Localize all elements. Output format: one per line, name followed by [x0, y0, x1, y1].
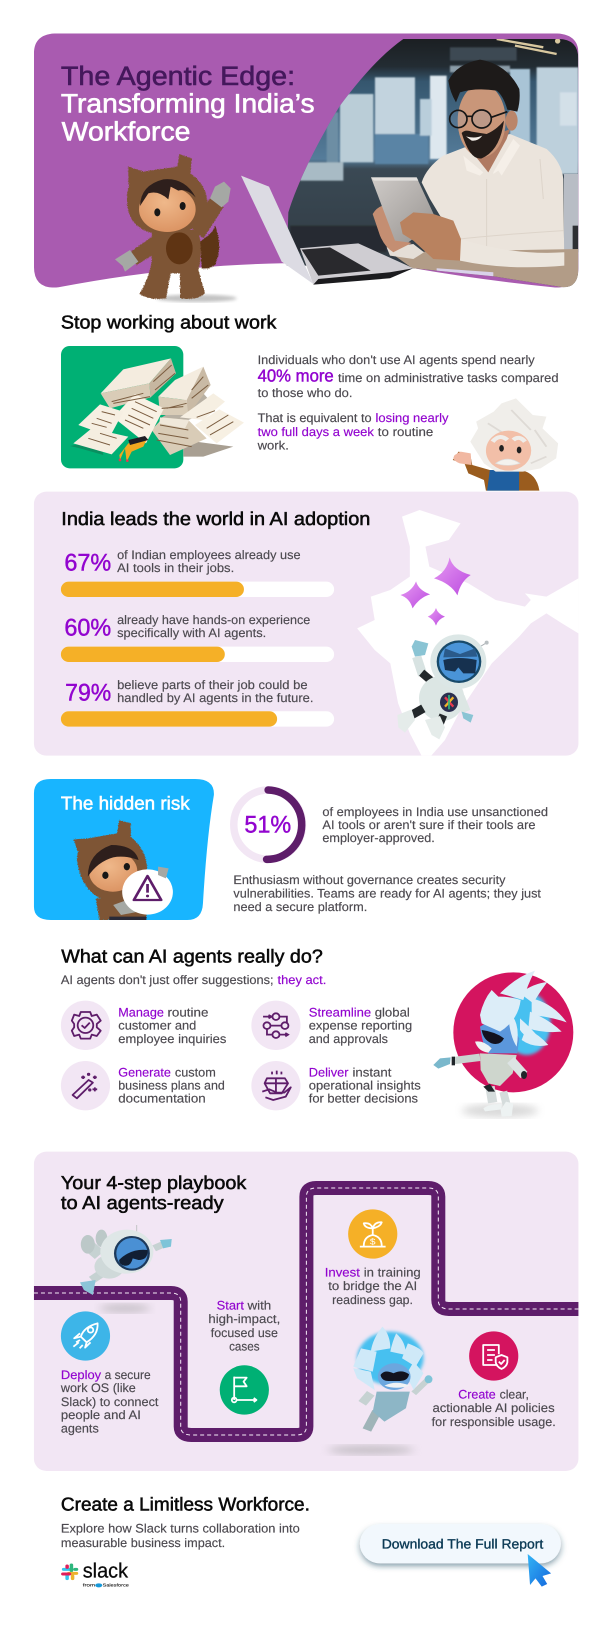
mascot: diving robot: [80, 1225, 172, 1313]
step: start: focused use: [211, 1326, 278, 1340]
item: streamline: global: [375, 1006, 410, 1019]
icon: sparkles: [400, 557, 471, 626]
heading: Your 4-step playbook: [61, 1172, 247, 1193]
mascot: robot astronaut: [397, 634, 489, 739]
risk text: need a secure platform.: [233, 900, 367, 914]
stat text: 40% more: [258, 366, 334, 386]
step: deploy: agents: [61, 1421, 99, 1435]
step: invest: [325, 1209, 421, 1307]
donut chart 51%: 51%: [244, 811, 291, 838]
mascot: robot professor on pink circle: [433, 971, 573, 1117]
heading: [61, 1172, 247, 1213]
stat: 60%: already have hands-on experience: [117, 613, 310, 627]
risk text: employer-approved.: [322, 831, 435, 845]
step: start: high-impact,: [208, 1312, 280, 1326]
stat: 79%: 79%: [65, 679, 111, 706]
section: hidden risk: [34, 779, 548, 920]
item: deliver: operational insights: [309, 1079, 421, 1092]
step: invest: to bridge the AI: [328, 1279, 417, 1293]
stat: 67%: AI tools in their jobs.: [117, 561, 234, 575]
stat: 60%: 60%: [64, 614, 111, 641]
heading: Stop working about work: [61, 312, 277, 333]
blue panel: [34, 779, 214, 920]
stat text: That is equivalent to: [258, 411, 372, 425]
logo: slack from Salesforce: [63, 1559, 129, 1588]
stepped road: [34, 1188, 578, 1435]
hero banner: [34, 33, 578, 302]
photo of man at work: [280, 38, 578, 289]
icon: cursor arrow: [528, 1554, 551, 1587]
subheading: they act.: [278, 973, 326, 987]
step: start: Start: [217, 1299, 244, 1312]
item: generate: custom: [175, 1066, 216, 1079]
risk text: [233, 805, 548, 914]
mascot: professor: [453, 398, 558, 491]
stat: 79%: [61, 678, 334, 727]
item: deliver: instant: [352, 1066, 392, 1079]
button: download report: [360, 1524, 561, 1563]
item: generate: [61, 1061, 225, 1110]
step: create: [432, 1331, 556, 1429]
stat text: work.: [257, 438, 289, 452]
donut chart 51%: [234, 790, 302, 859]
step: create: clear,: [500, 1388, 529, 1401]
step: start: [208, 1299, 280, 1415]
item: streamline: and approvals: [309, 1032, 388, 1046]
risk text: AI tools or aren't sure if their tools are: [322, 818, 535, 832]
button: download report: Download The Full Report: [382, 1537, 543, 1551]
map of India: [357, 510, 578, 756]
stat text: two full days a week: [258, 425, 374, 439]
closing text: Explore how Slack turns collaboration into: [61, 1522, 300, 1535]
mascot: bear waving: [115, 154, 237, 302]
logo: slack from Salesforce: slack: [83, 1559, 128, 1582]
risk text: vulnerabilities. Teams are ready for AI agents; they just: [233, 887, 541, 900]
step: deploy: people and AI: [61, 1408, 141, 1422]
panel background: [34, 492, 578, 756]
footer: [61, 1494, 561, 1588]
item: deliver: [251, 1061, 421, 1110]
item: deliver: Deliver: [309, 1066, 349, 1079]
section: what AI agents can do: [61, 946, 573, 1117]
step: invest: $: [370, 1236, 376, 1246]
item: manage: employee inquiries: [118, 1032, 226, 1046]
stat text: [257, 353, 559, 452]
title: Transforming India’s: [61, 89, 315, 118]
illustration: paper stacks on green panel: [61, 346, 244, 468]
stat text: to those who do.: [258, 386, 352, 400]
icon: warning sign: [122, 867, 173, 915]
step: deploy: Slack) to connect: [61, 1395, 159, 1409]
stat text: to routine: [378, 425, 433, 439]
title: Workforce: [62, 117, 190, 146]
step: invest: readiness gap.: [332, 1293, 413, 1307]
step: create: actionable AI policies: [432, 1401, 555, 1415]
stat: 79%: handled by AI agents in the future.: [117, 691, 313, 705]
step: deploy: Deploy: [61, 1368, 101, 1382]
heading: The hidden risk: [61, 792, 190, 813]
item: generate: business plans and: [118, 1079, 225, 1092]
item: streamline: expense reporting: [309, 1019, 412, 1032]
stat text: losing nearly: [375, 411, 449, 425]
step: deploy: a secure: [105, 1368, 151, 1382]
item: generate: Generate: [118, 1066, 171, 1079]
title: The Agentic Edge:: [61, 61, 295, 91]
stat: 67%: of Indian employees already use: [117, 548, 301, 562]
mascot: bear with warning sign: [73, 820, 147, 920]
purple hero panel: [34, 33, 578, 288]
logo: slack from Salesforce: Salesforce: [103, 1583, 129, 1588]
laptop: [241, 176, 413, 285]
closing text: [61, 1522, 300, 1550]
item: generate: documentation: [118, 1092, 206, 1105]
heading: to AI agents-ready: [61, 1192, 224, 1213]
step: invest: Invest: [325, 1266, 360, 1279]
item: streamline: Streamline: [309, 1006, 371, 1019]
step: create: Create: [458, 1388, 496, 1401]
stat: 60%: specifically with AI agents.: [117, 626, 266, 640]
mascot: flying robot professor: [328, 1327, 432, 1455]
risk text: of employees in India use unsanctioned: [322, 805, 548, 819]
panel: India leads the world: [34, 492, 578, 756]
panel: 4-step playbook: [34, 1152, 578, 1471]
item: manage: Manage: [118, 1006, 164, 1019]
item: manage: routine: [167, 1006, 208, 1019]
closing text: measurable business impact.: [61, 1536, 225, 1550]
title: [61, 61, 315, 146]
stat text: Individuals who don't use AI agents spend nearly: [258, 353, 535, 367]
logo: slack from Salesforce: from: [83, 1583, 95, 1588]
stat: 79%: believe parts of their job could be: [117, 678, 308, 692]
item: deliver: for better decisions: [309, 1092, 418, 1105]
heading: Create a Limitless Workforce.: [61, 1494, 310, 1515]
section: stop working about work: [61, 312, 559, 491]
step: create: for responsible usage.: [432, 1415, 556, 1429]
heading: What can AI agents really do?: [61, 946, 323, 967]
panel background: [34, 1152, 578, 1471]
step: deploy: [61, 1311, 159, 1435]
stat: 60%: [61, 613, 334, 662]
subheading: AI agents don't just offer suggestions;: [61, 973, 274, 987]
step: start: cases: [229, 1339, 260, 1353]
heading: India leads the world in AI adoption: [61, 508, 370, 529]
item: manage: [61, 1001, 226, 1050]
step: invest: in training: [364, 1266, 421, 1279]
item: manage: customer and: [118, 1019, 196, 1032]
risk text: Enthusiasm without governance creates security: [233, 873, 506, 887]
step: start: with: [247, 1299, 271, 1312]
stat: 67%: 67%: [64, 549, 111, 576]
stat: 67%: [61, 548, 334, 597]
item: streamline: [251, 1001, 412, 1050]
stat text: time on administrative tasks compared: [338, 371, 559, 385]
step: deploy: work OS (like: [61, 1381, 136, 1395]
